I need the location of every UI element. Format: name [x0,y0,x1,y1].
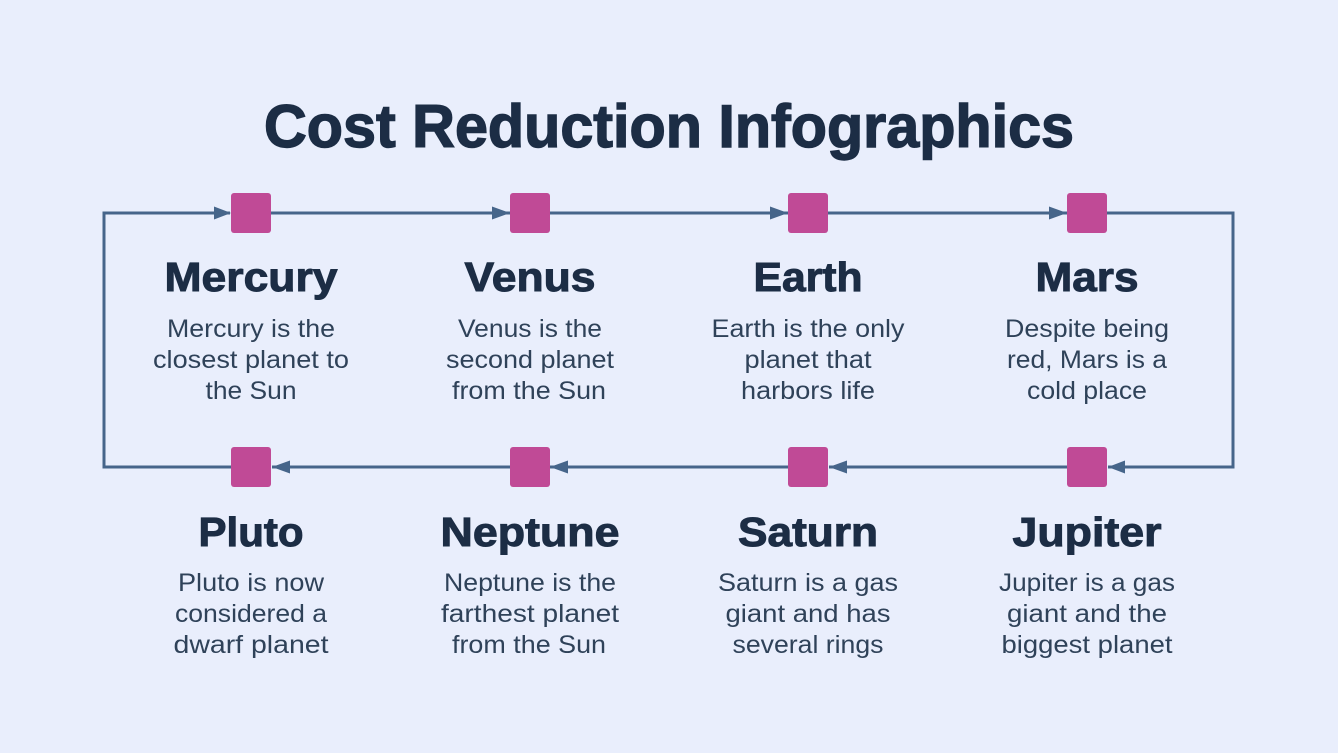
text block: Mars: Despite being [1005,315,1169,343]
text block: Jupiter [999,509,1175,659]
text block: Mercury: Mercury [164,254,338,300]
text block: Venus: Venus [464,254,596,300]
text block: Mercury: Mercury is the [167,315,335,343]
text block: Earth [712,254,905,405]
marker: Saturn [788,447,828,487]
text block: Pluto: dwarf planet [174,631,329,659]
text block: Mercury: closest planet to [153,346,349,374]
node markers [231,193,1107,487]
text block: Saturn: several rings [732,631,884,659]
text block: Mars [1005,254,1169,405]
marker: Pluto [231,447,271,487]
arrow: loop into Mercury [104,206,231,467]
arrow: Venus to Earth [550,206,788,220]
text block: Venus [446,254,614,405]
text block: Saturn: Saturn [738,509,878,555]
marker: Mars [1067,193,1107,233]
marker: Mercury [231,193,271,233]
arrow: Neptune to Pluto [272,460,510,474]
text block: Jupiter: biggest planet [1002,631,1173,659]
text block: Neptune: farthest planet [441,600,619,628]
text block: Saturn: Saturn is a gas [718,569,898,597]
text block: Saturn: giant and has [726,600,890,628]
text block: Earth: Earth is the only [712,315,905,343]
text block: Mars: red, Mars is a [1007,346,1167,374]
text block: Pluto: considered a [175,600,327,628]
arrow: Jupiter to Saturn [829,460,1067,474]
text block: Venus: second planet [446,346,614,374]
text block: Neptune: from the Sun [452,631,606,659]
title: Cost Reduction Infographics [264,93,1074,160]
text block: Venus: Venus is the [458,315,602,343]
text block: Neptune: Neptune is the [444,569,616,597]
text block: Mercury [153,254,349,405]
text block: Jupiter: Jupiter is a gas [999,569,1175,597]
text block: Mercury: the Sun [206,377,296,405]
marker: Neptune [510,447,550,487]
text block: Mars: cold place [1027,377,1147,405]
text block: Jupiter: Jupiter [1012,509,1162,555]
arrow: Saturn to Neptune [550,460,788,474]
arrow: Mars to Jupiter [1107,213,1233,474]
text block: Saturn [718,509,898,659]
marker: Earth [788,193,828,233]
marker: Venus [510,193,550,233]
text block: Pluto: Pluto [198,509,304,555]
text block: Pluto: Pluto is now [178,569,325,597]
arrows: process loop [104,206,1233,474]
text block: Venus: from the Sun [452,377,606,405]
marker: Jupiter [1067,447,1107,487]
text block: Neptune: Neptune [440,509,620,555]
text block: Earth: harbors life [741,377,875,405]
text block: Pluto [174,509,329,659]
text block: Earth: planet that [744,346,872,374]
text block: Neptune [440,509,620,659]
arrow: Mercury to Venus [271,206,510,220]
arrow: Earth to Mars [828,206,1067,220]
text block: Jupiter: giant and the [1007,600,1167,628]
text block: Earth: Earth [754,254,862,300]
text block: Mars: Mars [1036,254,1138,300]
